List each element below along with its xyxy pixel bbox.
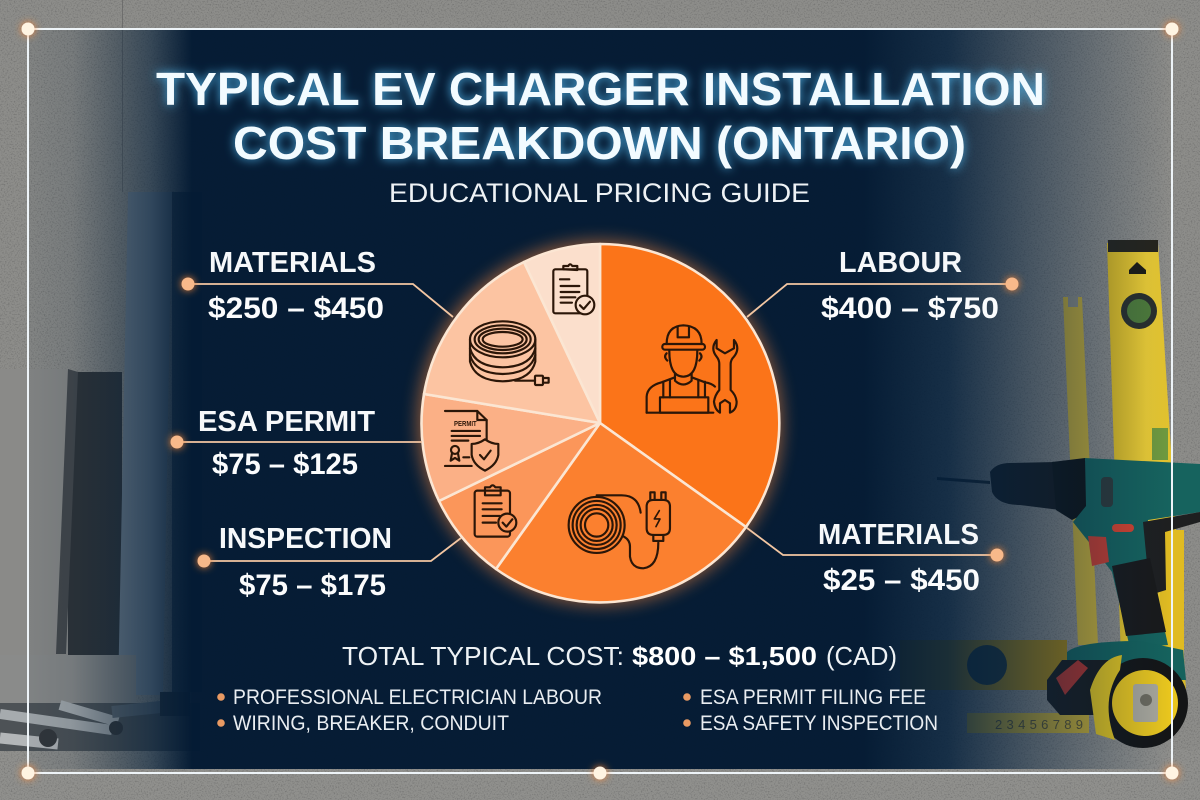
total cost: (CAD) <box>826 641 897 671</box>
pie icons <box>445 264 737 568</box>
pie chart <box>417 240 783 606</box>
callout: labour: $400 – $750 <box>821 292 999 325</box>
horizontal level <box>900 640 1067 690</box>
tape measure blade <box>1063 297 1098 645</box>
callout: ESA permit: $75 – $125 <box>212 448 358 481</box>
icon: cable coil <box>470 321 549 385</box>
icon: plug and cable <box>569 492 670 568</box>
callout: ESA permit: ESA PERMIT <box>198 406 375 438</box>
slice: clipboard <box>524 244 600 423</box>
callout: materials upper: $250 – $450 <box>208 292 384 325</box>
slice: materials upper <box>424 262 600 423</box>
floor tape <box>967 713 1089 733</box>
drill <box>937 458 1200 680</box>
total cost <box>342 641 897 671</box>
callout: inspection: $75 – $175 <box>239 569 386 602</box>
list: included items right <box>683 686 938 735</box>
callout: materials lower: MATERIALS <box>818 519 979 551</box>
callout: inspection: INSPECTION <box>219 523 392 555</box>
callout: labour <box>747 247 1018 325</box>
list: included items right: ESA SAFETY INSPECTION <box>700 712 938 735</box>
callout: materials lower: $25 – $450 <box>823 564 980 597</box>
callout: materials upper <box>182 247 453 325</box>
callout: ESA permit <box>170 406 422 481</box>
title: TYPICAL EV CHARGER INSTALLATION <box>156 63 1045 115</box>
list: included items left <box>217 686 602 735</box>
subtitle: EDUCATIONAL PRICING GUIDE <box>389 178 810 208</box>
spirit level <box>1107 240 1186 690</box>
icon: permit document: PERMIT <box>454 421 477 428</box>
background: building materials on left <box>0 192 202 751</box>
list: included items left: WIRING, BREAKER, CONDUIT <box>233 712 509 735</box>
icon: wrench <box>713 340 737 413</box>
icon: worker <box>647 325 715 413</box>
slice: inspection <box>439 423 600 569</box>
icon: permit document <box>445 411 498 471</box>
list: included items right: ESA PERMIT FILING FEE <box>700 686 926 709</box>
total cost: $800 – $1,500 <box>632 641 817 671</box>
list: included items left: PROFESSIONAL ELECTRICIAN LABOUR <box>233 686 602 709</box>
title: COST BREAKDOWN (ONTARIO) <box>233 117 966 169</box>
slice: ESA permit <box>422 394 600 501</box>
floor tape: 2 3 4 5 6 7 8 9 <box>995 717 1083 732</box>
icon: clipboard top <box>553 264 594 314</box>
callout: inspection <box>198 523 461 602</box>
callout: materials lower <box>747 519 1004 597</box>
total cost: TOTAL TYPICAL COST: <box>342 641 624 671</box>
callout: labour: LABOUR <box>839 247 962 279</box>
callout: materials upper: MATERIALS <box>209 247 376 279</box>
title <box>156 63 1045 169</box>
slice: labour <box>600 244 779 527</box>
background: tools on right <box>900 240 1200 748</box>
battery and tape measure <box>1047 655 1188 748</box>
icon: clipboard inspection <box>475 485 516 537</box>
slice: materials lower <box>496 423 746 602</box>
